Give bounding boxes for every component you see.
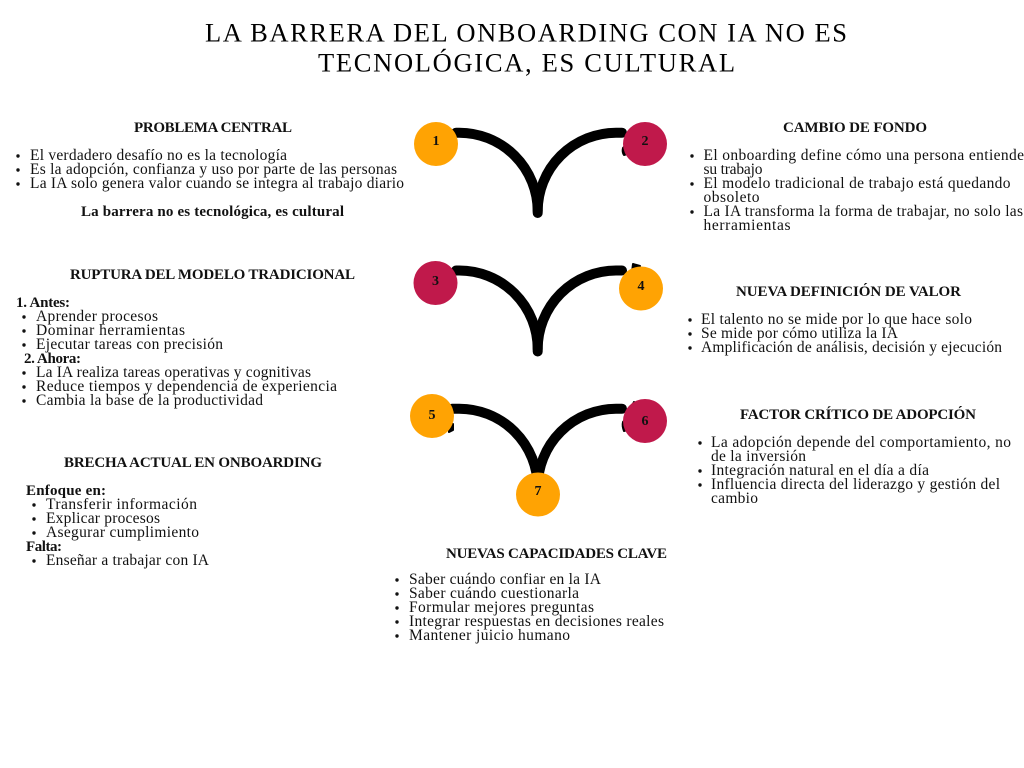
list: factor crítico: La adopción depende del comportamiento, no <box>711 434 1011 451</box>
node 5: 5 <box>428 408 436 423</box>
list: nueva definición: Amplificación de análisis, decisión y ejecución <box>701 339 1002 356</box>
list: nuevas capacidades <box>395 571 664 644</box>
list: ruptura: Dominar herramientas <box>36 322 185 339</box>
list: brecha: Falta: <box>26 539 62 555</box>
heading: nuevas capacidades: NUEVAS CAPACIDADES CLAVE <box>446 546 667 562</box>
list: nuevas capacidades: Saber cuándo confiar en la IA <box>409 571 602 588</box>
list: brecha: Transferir información <box>46 496 197 513</box>
list: problema central: Es la adopción, confianza y uso por parte de las personas <box>30 161 397 178</box>
panel: problema central <box>16 120 404 220</box>
node 4 <box>619 266 663 310</box>
list: factor crítico <box>698 434 1011 507</box>
node 7: 7 <box>534 484 542 499</box>
heading: ruptura: RUPTURA DEL MODELO TRADICIONAL <box>70 267 355 283</box>
list: nueva definición: Se mide por cómo utiliza la IA <box>701 325 899 342</box>
list: brecha: Explicar procesos <box>46 510 160 527</box>
list: cambio de fondo: El modelo tradicional de trabajo está quedando <box>704 175 1011 192</box>
list: nuevas capacidades: Saber cuándo cuestionarla <box>409 585 579 602</box>
heading: brecha: BRECHA ACTUAL EN ONBOARDING <box>64 455 322 471</box>
list: brecha <box>26 483 210 569</box>
diagram: connector 1-2 <box>414 122 667 213</box>
callout: la barrera: La barrera no es tecnológica, es cultural <box>81 204 344 220</box>
list: cambio de fondo <box>690 147 1024 234</box>
list: cambio de fondo: obsoleto <box>704 189 760 206</box>
node 3: 3 <box>432 274 439 289</box>
list: cambio de fondo: su trabajo <box>704 161 763 178</box>
list: ruptura <box>16 295 337 409</box>
diagram: connector 3-4 <box>414 261 663 352</box>
list: ruptura: Cambia la base de la productividad <box>36 392 263 409</box>
list: nuevas capacidades: Integrar respuestas en decisiones reales <box>409 613 664 630</box>
node 2 <box>623 122 667 166</box>
list: cambio de fondo: La IA transforma la forma de trabajar, no solo las <box>704 203 1023 220</box>
node 1 <box>414 122 458 166</box>
list: factor crítico: cambio <box>711 490 758 507</box>
panel: factor crítico de adopción <box>698 406 1011 507</box>
list: nuevas capacidades: Mantener juicio humano <box>409 627 570 644</box>
list: cambio de fondo: herramientas <box>704 217 790 234</box>
heading: cambio de fondo: CAMBIO DE FONDO <box>783 120 927 136</box>
list: problema central <box>16 147 404 192</box>
heading: factor crítico: FACTOR CRÍTICO DE ADOPCIÓN <box>740 406 976 423</box>
list: factor crítico: de la inversión <box>711 448 806 465</box>
title: LA BARRERA DEL ONBOARDING CON IA NO ES <box>205 18 847 48</box>
node 6 <box>623 399 667 443</box>
list: ruptura: 1. Antes: <box>16 295 70 311</box>
list: brecha: Enfoque en: <box>26 483 106 499</box>
node 2: 2 <box>642 134 648 149</box>
list: problema central: La IA solo genera valor cuando se integra al trabajo diario <box>30 175 404 192</box>
title <box>205 18 847 78</box>
diagram: connector 5-6-7 <box>410 394 667 516</box>
panel: ruptura del modelo tradicional <box>16 267 355 409</box>
list: nuevas capacidades: Formular mejores preguntas <box>409 599 594 616</box>
panel: nuevas capacidades clave <box>395 546 667 644</box>
list: nueva definición: El talento no se mide por lo que hace solo <box>701 311 972 328</box>
list: cambio de fondo: El onboarding define cómo una persona entiende <box>704 147 1024 164</box>
node 1: 1 <box>432 134 440 149</box>
node 7 <box>516 472 560 516</box>
list: nueva definición <box>688 311 1002 356</box>
panel: nueva definición de valor <box>688 283 1002 356</box>
title: TECNOLÓGICA, ES CULTURAL <box>318 48 735 78</box>
node 3 <box>414 261 458 305</box>
list: ruptura: Ejecutar tareas con precisión <box>36 336 223 353</box>
list: ruptura: Aprender procesos <box>36 308 158 325</box>
heading: problema central: PROBLEMA CENTRAL <box>134 120 292 136</box>
heading: nueva definición: NUEVA DEFINICIÓN DE VALOR <box>736 283 961 300</box>
panel: cambio de fondo <box>690 120 1024 234</box>
list: factor crítico: Integración natural en el día a día <box>711 462 929 479</box>
list: brecha: Asegurar cumplimiento <box>46 524 199 541</box>
node 6: 6 <box>642 414 648 429</box>
panel: brecha actual en onboarding <box>26 455 322 569</box>
list: ruptura: Reduce tiempos y dependencia de experiencia <box>36 378 337 395</box>
list: brecha: Enseñar a trabajar con IA <box>46 552 210 569</box>
node 4: 4 <box>638 279 644 294</box>
list: problema central: El verdadero desafío no es la tecnología <box>30 147 287 164</box>
list: ruptura: 2. Ahora: <box>24 351 81 367</box>
node 5 <box>410 394 454 438</box>
list: ruptura: La IA realiza tareas operativas y cognitivas <box>36 364 311 381</box>
list: factor crítico: Influencia directa del liderazgo y gestión del <box>711 476 1000 493</box>
